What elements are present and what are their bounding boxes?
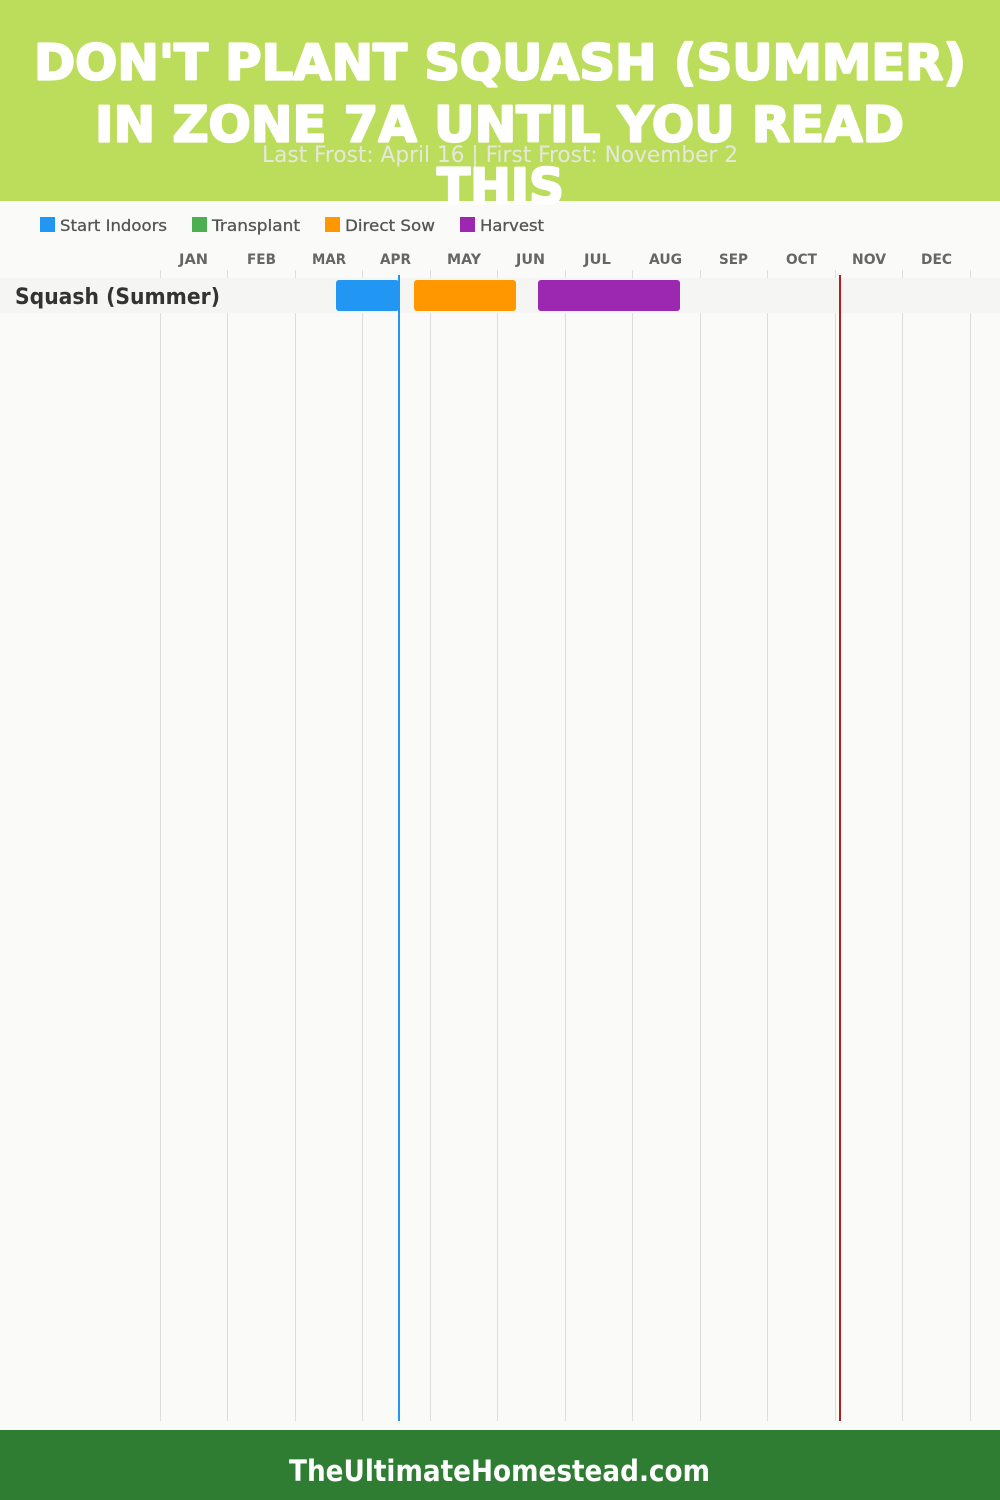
month axis labels: JUN (515, 252, 545, 268)
month axis labels: NOV (852, 252, 886, 268)
month axis labels (178, 252, 952, 268)
subtitle: frost dates: Last Frost: April 16 | First Frost: November 2 (262, 143, 738, 168)
month axis labels: DEC (921, 252, 952, 268)
footer band (0, 1430, 1000, 1500)
row background (0, 278, 1000, 313)
month axis labels: APR (380, 252, 411, 268)
bar: start indoors (336, 280, 399, 311)
month axis labels: SEP (719, 252, 748, 268)
legend item: direct sow: Direct Sow (345, 216, 435, 235)
legend item: harvest: Harvest (480, 216, 544, 235)
title: IN ZONE 7A UNTIL YOU READ (95, 96, 904, 154)
legend item: transplant: Transplant (211, 216, 300, 235)
month axis labels: OCT (786, 252, 817, 268)
month axis labels: FEB (247, 252, 276, 268)
month axis labels: JAN (178, 252, 208, 268)
last frost marker line (398, 275, 400, 1421)
header banner (0, 0, 1000, 201)
title: DON'T PLANT SQUASH (SUMMER) (34, 34, 966, 92)
month axis labels: AUG (649, 252, 682, 268)
title (34, 34, 966, 216)
row label: Squash (Summer) (15, 285, 220, 310)
footer website text: TheUltimateHomestead.com (289, 1454, 710, 1488)
bar: direct sow (414, 280, 516, 311)
title: THIS (437, 158, 564, 216)
month axis labels: MAY (447, 252, 482, 268)
chart row: squash (summer) (0, 278, 1000, 313)
legend (40, 216, 544, 235)
month axis labels: MAR (312, 252, 346, 268)
legend item: start indoors: Start Indoors (60, 216, 167, 235)
month axis labels: JUL (583, 252, 611, 268)
bar: harvest (538, 280, 680, 311)
first frost marker line (839, 275, 841, 1421)
